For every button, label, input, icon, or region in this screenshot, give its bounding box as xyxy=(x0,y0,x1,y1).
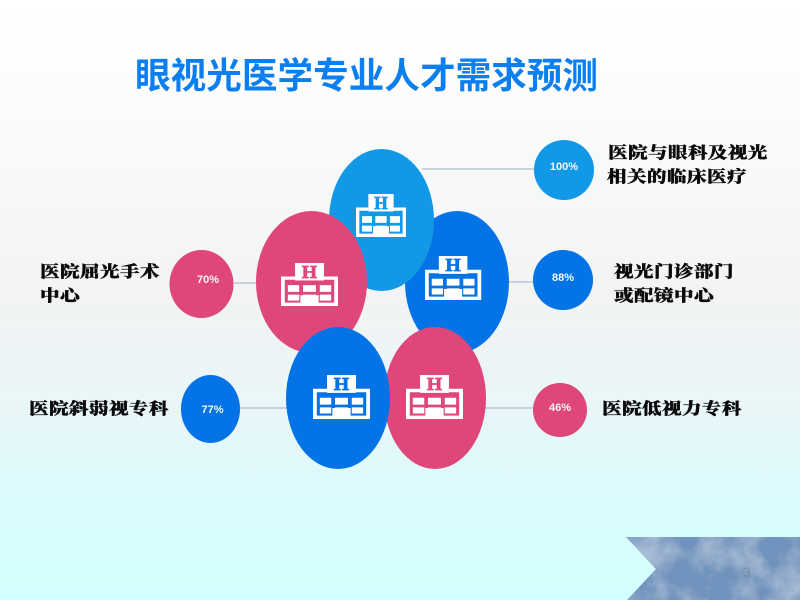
connector lines xyxy=(234,169,534,408)
label: refractive surgery xyxy=(40,262,160,305)
badge: 88% xyxy=(533,250,593,310)
label: optometry clinic: 视光门诊部门 xyxy=(614,262,734,281)
label: optometry clinic: 或配镜中心 xyxy=(614,286,717,305)
petal: bottom pink with hospital icon xyxy=(384,327,486,469)
label: clinical departments: 医院与眼科及视光 xyxy=(608,143,768,162)
label: low vision: 医院低视力专科 xyxy=(602,399,742,418)
badge: 46%: 46% xyxy=(549,402,571,414)
petal: top light blue with hospital icon xyxy=(329,149,434,291)
label: refractive surgery: 中心 xyxy=(40,287,83,305)
badge: 100%: 100% xyxy=(550,161,578,173)
label: optometry clinic xyxy=(614,262,734,305)
petal: right blue with hospital icon: H xyxy=(446,256,461,276)
title: 眼视光医学专业人才需求预测 xyxy=(135,56,598,96)
label: clinical departments xyxy=(607,143,768,186)
petal: bottom blue with hospital icon: H xyxy=(334,375,350,395)
petal: right blue with hospital icon xyxy=(405,211,509,353)
petal: bottom pink with hospital icon: H xyxy=(427,375,443,395)
petal: left pink with hospital icon xyxy=(256,211,367,353)
petal: top light blue with hospital icon: H xyxy=(374,194,388,213)
badge: 100% xyxy=(534,140,594,200)
petal: bottom blue with hospital icon xyxy=(286,327,390,469)
label: clinical departments: 相关的临床医疗 xyxy=(607,167,747,186)
label: refractive surgery: 医院屈光手术 xyxy=(40,262,160,281)
page number: 3 xyxy=(743,564,751,580)
badge: 46% xyxy=(533,383,587,437)
badge: 77%: 77% xyxy=(201,404,224,416)
badge: 88%: 88% xyxy=(552,272,574,284)
badge: 70%: 70% xyxy=(197,274,219,286)
badge: 70% xyxy=(170,250,234,318)
badge: 77% xyxy=(181,375,240,443)
ribbon: corner decoration xyxy=(626,537,800,600)
label: strabismus: 医院斜弱视专科 xyxy=(29,399,169,418)
petal: left pink with hospital icon: H xyxy=(302,263,318,282)
